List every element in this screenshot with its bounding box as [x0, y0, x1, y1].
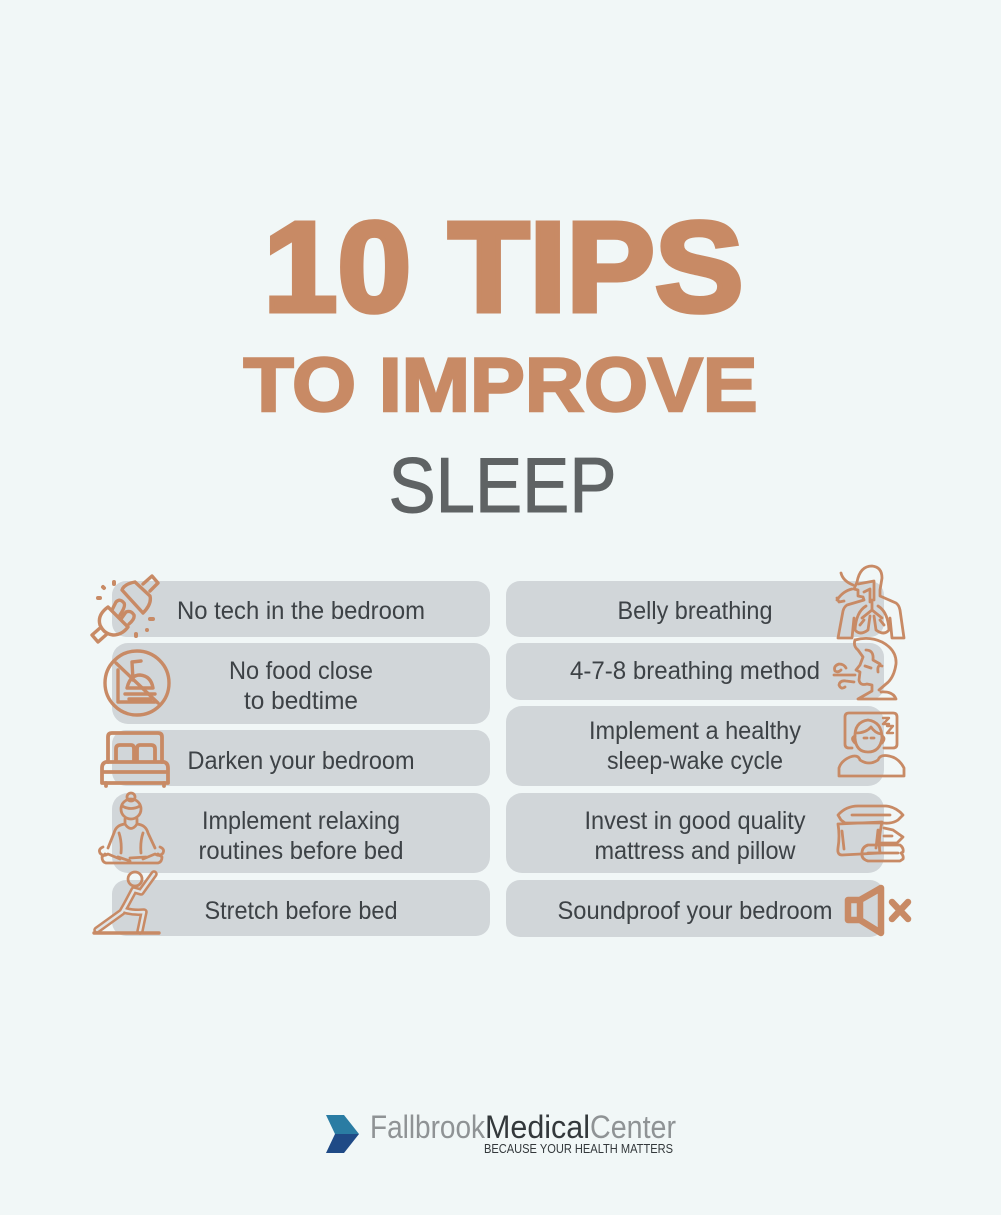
- icon: no food: [105, 651, 169, 715]
- title: sleep: SLEEP: [388, 441, 616, 529]
- panel: relaxing routines: [99, 793, 490, 873]
- panel: mattress and pillow: [506, 793, 903, 873]
- icon: person sleeping in bed: [839, 713, 904, 776]
- panel: soundproof your bedroom: [506, 880, 908, 937]
- panel: no tech in the bedroom: [92, 576, 490, 642]
- panel: no food close to bedtime: [105, 643, 490, 724]
- logo wordmark: center: Center: [590, 1109, 676, 1145]
- title: 10 tips: 10 TIPS: [264, 196, 744, 339]
- panel: belly breathing: Belly breathing: [618, 597, 772, 625]
- icon: unplugged cable: [92, 576, 158, 642]
- logo: Fallbrook Medical Center: [326, 1109, 676, 1156]
- logo tagline: BECAUSE YOUR HEALTH MATTERS: [484, 1142, 673, 1156]
- panel: relaxing routines: routines before bed: [198, 837, 404, 865]
- panel: healthy sleep-wake cycle: Implement a healthy: [589, 717, 801, 745]
- logo mark: chevron: [326, 1115, 359, 1153]
- icon: meditating person: [99, 793, 164, 863]
- panel: 4-7-8 breathing method: 4-7-8 breathing method: [570, 657, 820, 685]
- panel: stretch before bed: [94, 872, 490, 936]
- panel: no tech in the bedroom: No tech in the bedroom: [177, 597, 425, 625]
- panel: stretch before bed: Stretch before bed: [204, 897, 398, 925]
- icon: person exhaling: [834, 638, 896, 699]
- icon: bed: [102, 733, 168, 786]
- panel: relaxing routines: Implement relaxing: [202, 807, 400, 835]
- logo wordmark: fallbrook: Fallbrook: [370, 1109, 486, 1145]
- icon: pillows and mattress stack: [838, 806, 903, 861]
- panel: darken your bedroom: [102, 730, 490, 786]
- panel: soundproof your bedroom: Soundproof your bedroom: [558, 897, 832, 925]
- panel: 4-7-8 breathing method: [506, 638, 896, 700]
- icon: muted speaker: [848, 888, 908, 933]
- panel: no food close to bedtime: to bedtime: [244, 687, 358, 715]
- panel: belly breathing: [506, 566, 904, 638]
- logo wordmark: medical: Medical: [485, 1109, 590, 1145]
- title: to improve: TO IMPROVE: [244, 343, 758, 428]
- icon: lungs and airway: [837, 566, 904, 638]
- panel: darken your bedroom: Darken your bedroom: [188, 747, 414, 775]
- panel: healthy sleep-wake cycle: [506, 706, 904, 786]
- icon: stretching person: [94, 872, 159, 933]
- panel: no food close to bedtime: No food close: [229, 657, 373, 685]
- panel: mattress and pillow: mattress and pillow: [594, 837, 796, 865]
- panel: healthy sleep-wake cycle: sleep-wake cycle: [607, 747, 783, 775]
- panel: mattress and pillow: Invest in good quality: [584, 807, 806, 835]
